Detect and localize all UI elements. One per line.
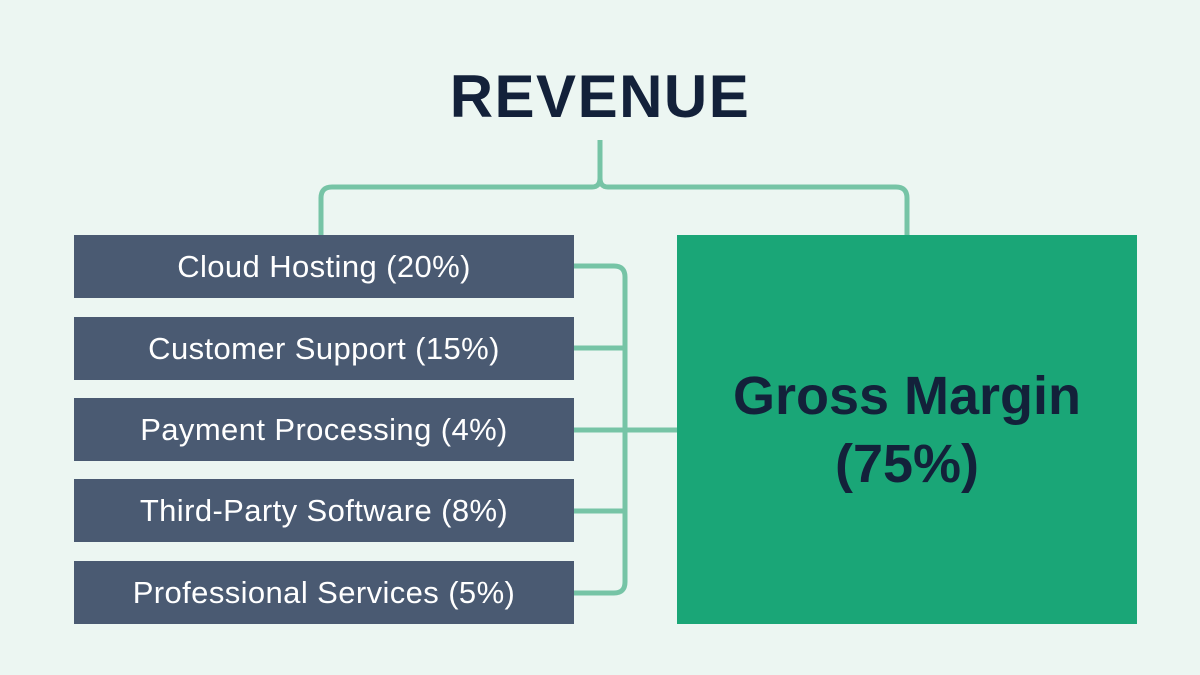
- title: REVENUE: [450, 63, 750, 130]
- gross margin panel: Gross Margin: [733, 366, 1081, 426]
- box: payment processing: [74, 398, 574, 461]
- gross margin panel: [677, 235, 1137, 624]
- box: cloud hosting: [74, 235, 574, 298]
- box: payment processing: Payment Processing (4%): [140, 412, 508, 446]
- box: cloud hosting: Cloud Hosting (20%): [177, 248, 471, 284]
- box: customer support: [74, 317, 574, 380]
- box: customer support: Customer Support (15%): [148, 330, 500, 366]
- box: third-party software: [74, 479, 574, 542]
- box: professional services: Professional Services (5%): [133, 574, 515, 610]
- box: professional services: [74, 561, 574, 624]
- box: third-party software: Third-Party Software (8%): [140, 492, 508, 528]
- gross margin panel: (75%): [835, 434, 979, 494]
